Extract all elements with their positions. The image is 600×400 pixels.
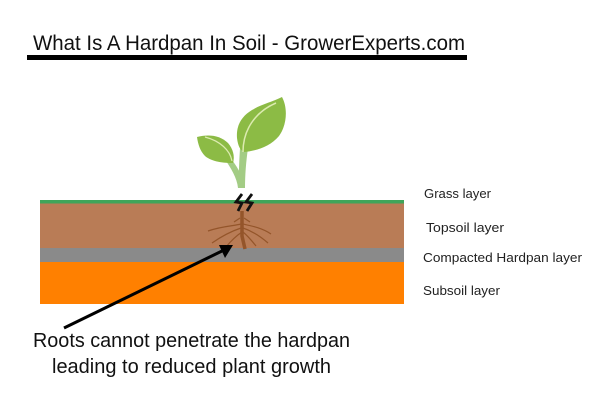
label: subsoil layer: Subsoil layer [423,284,500,298]
hardpan layer band [40,248,404,262]
label: compacted hardpan layer: Compacted Hardpan layer [423,251,582,265]
subsoil layer band [40,262,404,304]
label: grass layer: Grass layer [424,187,491,201]
right leaf [237,97,286,152]
caption: Roots cannot penetrate the hardpan [33,330,350,352]
caption: leading to reduced plant growth [52,356,331,378]
title underline [27,55,467,60]
caption [33,330,350,378]
icon: plant roots [208,211,271,249]
soil diagram [40,200,404,304]
plant stems [238,148,248,188]
arrow to hardpan [64,245,233,328]
topsoil layer band [40,204,404,248]
icon: blocked growth bolts [236,194,252,211]
icon: plant seedling [197,97,286,188]
title: What Is A Hardpan In Soil - GrowerExperts.com [33,32,465,55]
left leaf [197,135,234,163]
grass layer band [40,200,404,204]
label: topsoil layer: Topsoil layer [426,221,504,235]
